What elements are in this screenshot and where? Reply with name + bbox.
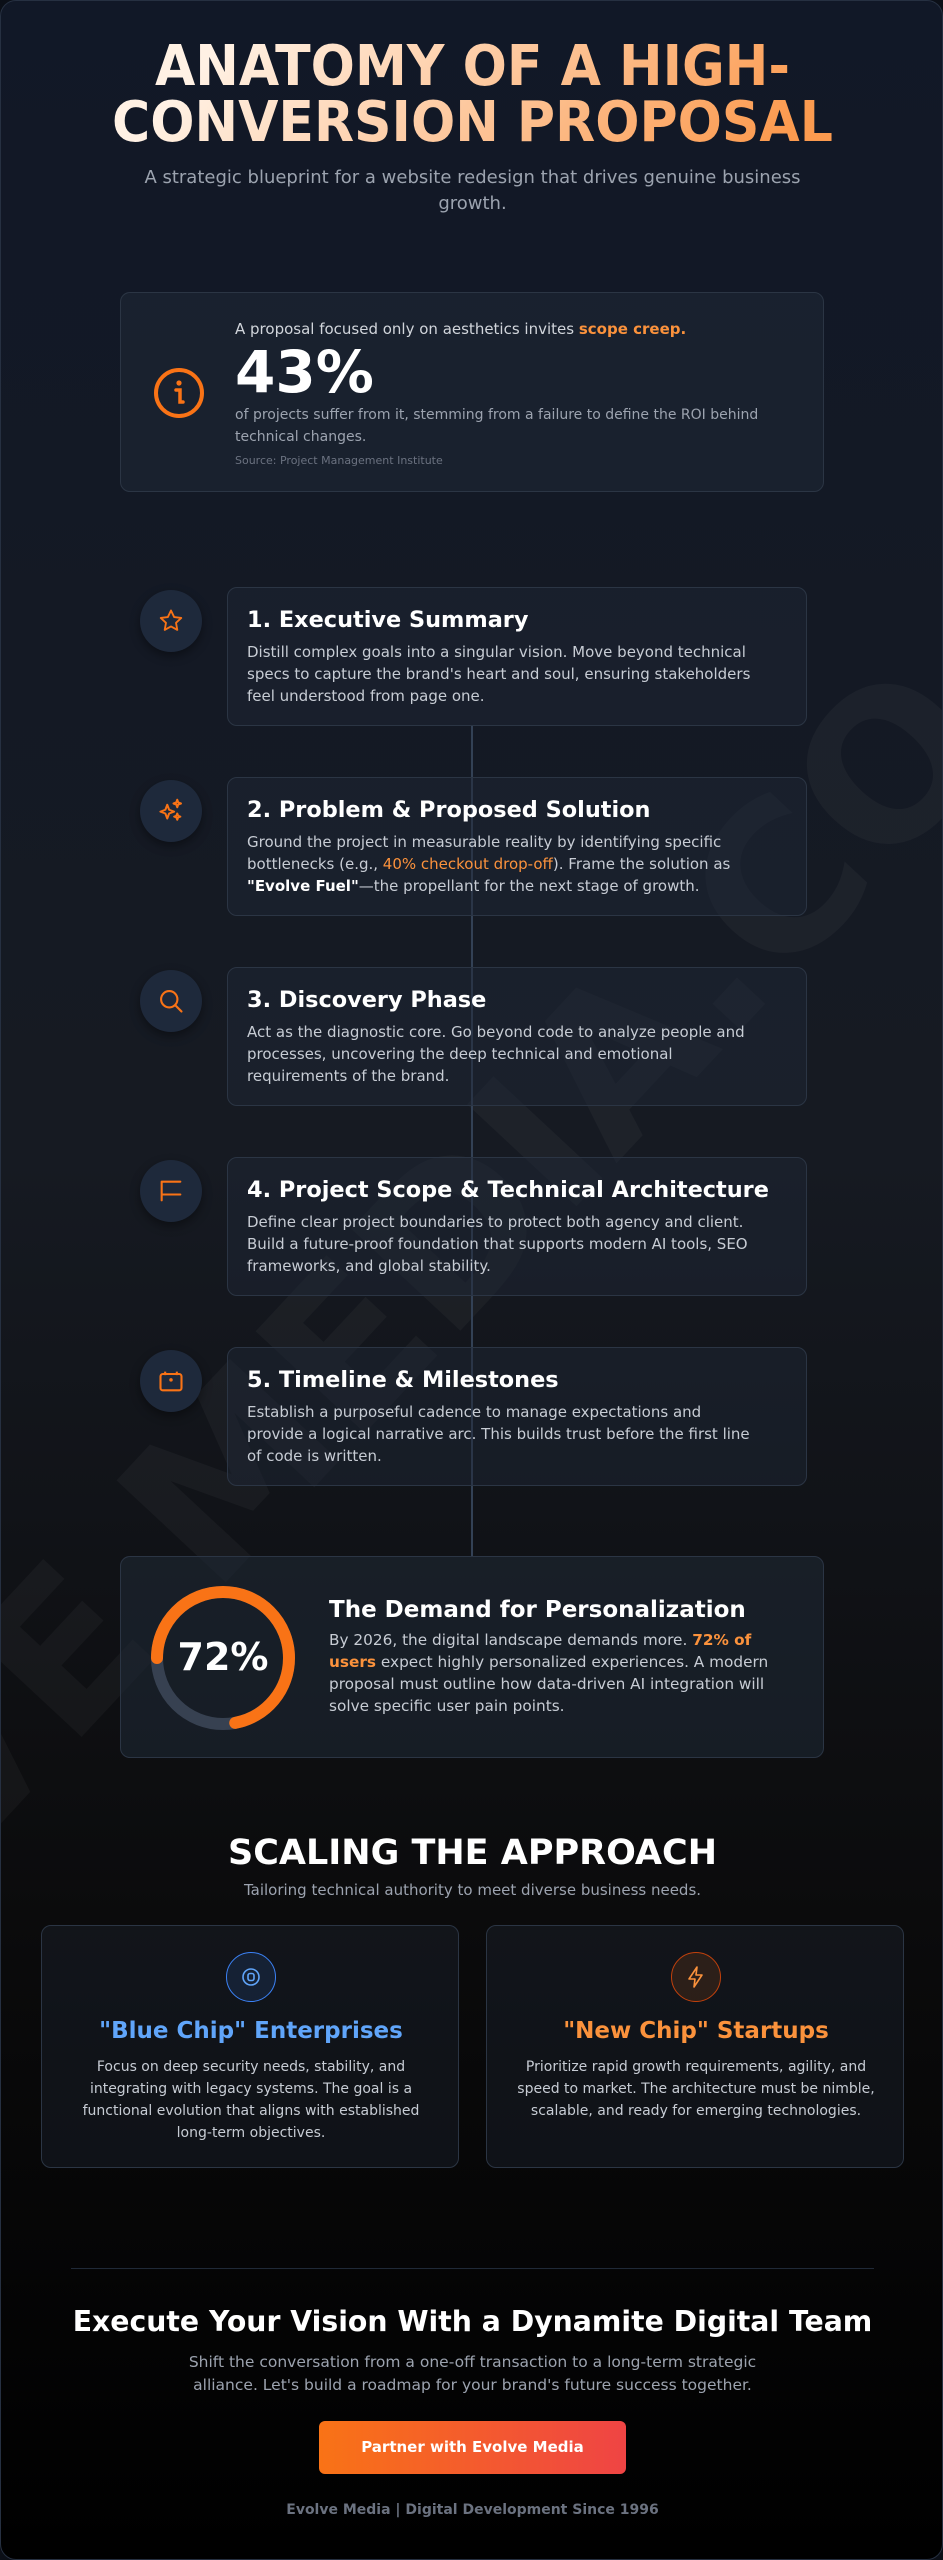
step 3: 3. Discovery Phase [247,987,486,1013]
step 1 [140,587,807,726]
step 2 [140,777,807,916]
heading: scaling: SCALING THE APPROACH [228,1833,717,1873]
step 4 [140,1157,807,1296]
subheading: scaling: Tailoring technical authority to meet diverse business needs. [244,1881,701,1899]
panel: new chip [486,1925,904,2168]
icon: search [140,970,202,1032]
button: Partner with Evolve Media [361,2438,584,2456]
panel: blue chip: "Blue Chip" Enterprises [99,2018,403,2044]
title [34,39,911,151]
panel: new chip: Prioritize rapid growth requirements, agility, and speed to market. The architecture must be nimble, scalable, and ready for emerging technologies. [517,2059,875,2119]
step 2: Ground the project in measurable reality by identifying specific [247,833,721,851]
icon: bracket [140,1160,202,1222]
step 3 [140,967,807,1106]
personalization text: By 2026, the digital landscape demands more. 72% of users expect highly personalized experiences. A modern proposal must outline how data-driven AI integration will solve specific user pain points. [329,1631,768,1715]
timeline line [471,726,473,1556]
step 5: of code is written. [247,1447,382,1465]
title: CONVERSION PROPOSAL [112,90,833,155]
donut chart 72% [151,1586,295,1730]
step 2: "Evolve Fuel"—the propellant for the next stage of growth. [247,877,700,895]
step 1: Distill complex goals into a singular vision. Move beyond technical [247,643,746,661]
icon: lightning [671,1952,721,2002]
stat text [235,320,758,467]
step 5: provide a logical narrative arc. This builds trust before the first line [247,1425,750,1443]
stat text: of projects suffer from it, stemming from a failure to define the ROI behind technical changes. [235,407,758,445]
stat text: Source: Project Management Institute [235,454,443,467]
text: CTA: Shift the conversation from a one-off transaction to a long-term strategic alliance. Let's build a roadmap for your brand's future success together. [189,2353,756,2394]
step 5: Establish a purposeful cadence to manage expectations and [247,1403,701,1421]
title: ANATOMY OF A HIGH- [155,34,790,99]
step 1: 1. Executive Summary [247,607,528,633]
panel: scope creep stat [120,292,824,492]
personalization text: The Demand for Personalization [329,1597,746,1623]
step 3: requirements of the brand. [247,1067,449,1085]
panel: personalization [120,1556,824,1758]
panel: new chip: "New Chip" Startups [563,2018,829,2044]
step 1: specs to capture the brand's heart and soul, ensuring stakeholders [247,665,750,683]
step 4: Define clear project boundaries to protect both agency and client. [247,1213,743,1231]
step 2: 2. Problem & Proposed Solution [247,797,650,823]
step 4: Build a future-proof foundation that supports modern AI tools, SEO [247,1235,748,1253]
step 2: bottlenecks (e.g., 40% checkout drop-off). Frame the solution as [247,855,730,873]
step 4: 4. Project Scope & Technical Architecture [247,1177,769,1203]
heading: CTA: Execute Your Vision With a Dynamite Digital Team [73,2305,872,2338]
panel: blue chip [41,1925,459,2168]
donut chart 72%: 72% [178,1635,268,1679]
step 4: frameworks, and global stability. [247,1257,491,1275]
icon: info [154,368,204,418]
icon: sparkles [140,780,202,842]
button [319,2421,626,2474]
step 1: feel understood from page one. [247,687,485,705]
step 5: 5. Timeline & Milestones [247,1367,559,1393]
step 3: Act as the diagnostic core. Go beyond code to analyze people and [247,1023,745,1041]
subtitle: A strategic blueprint for a website redesign that drives genuine business growth. [144,167,801,214]
footer: Evolve Media | Digital Development Since 1996 [286,2502,659,2518]
step 3: processes, uncovering the deep technical and emotional [247,1045,673,1063]
stat text: A proposal focused only on aesthetics invites scope creep. [235,320,686,338]
icon: blue chip [226,1952,276,2002]
stat text: 43% [235,338,374,406]
step 5 [140,1347,807,1486]
panel: blue chip: Focus on deep security needs, stability, and integrating with legacy systems. The goal is a functional evolution that aligns with established long-term objectives. [83,2059,419,2141]
icon: calendar [140,1350,202,1412]
icon: star [140,590,202,652]
